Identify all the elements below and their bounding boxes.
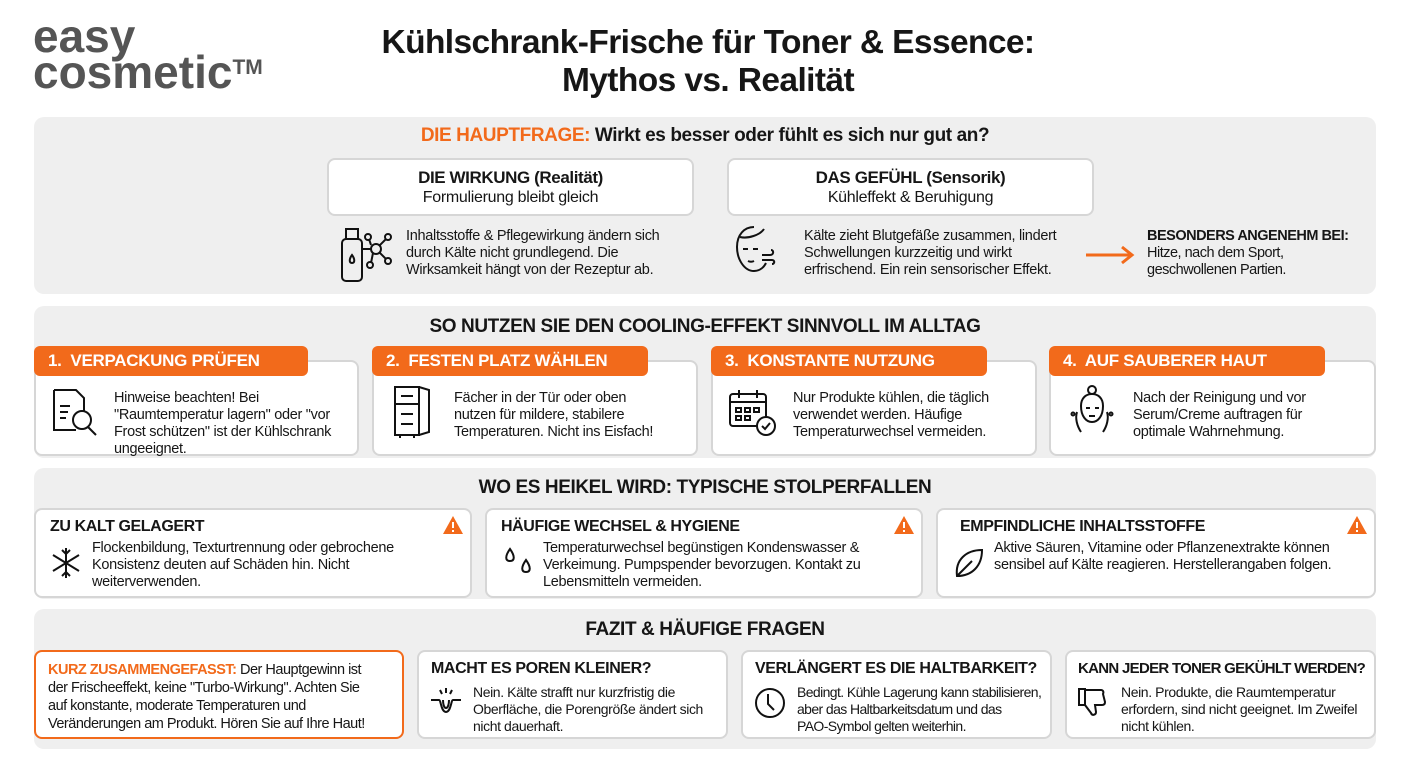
card: haltbarkeit: PAO-Symbol gelten weiterhin. (797, 718, 966, 734)
text: gefühl: Kälte zieht Blutgefäße zusammen, lindert (804, 228, 1056, 244)
tab 2: 2. FESTEN PLATZ WÄHLEN (386, 351, 607, 370)
card: zusammenfassung: auf konstante, moderate Temperaturen und (48, 698, 306, 714)
text: wirkung: Wirksamkeit hängt von der Rezeptur ab. (406, 262, 653, 278)
card: poren: nicht dauerhaft. (473, 718, 563, 734)
tab 3: 3. KONSTANTE NUTZUNG (725, 351, 935, 370)
heading: stolperfallen: WO ES HEIKEL WIRD: TYPISCHE STOLPERFALLEN (479, 477, 931, 498)
card: zu kalt: weiterverwenden. (92, 574, 201, 590)
card: zusammenfassung: der Frischeeffekt, keine "Turbo-Wirkung". Achten Sie (48, 680, 360, 696)
heading: hauptfrage: DIE HAUPTFRAGE: Wirkt es besser oder fühlt es sich nur gut an? (421, 125, 989, 146)
text (793, 390, 989, 440)
card: zu kalt: Flockenbildung, Texturtrennung oder gebrochene (92, 540, 394, 556)
icon: pore (431, 688, 461, 713)
card: poren: MACHT ES POREN KLEINER? (431, 660, 651, 677)
card: hygiene: HÄUFIGE WECHSEL & HYGIENE (501, 518, 740, 535)
text: besonders: geschwollenen Partien. (1147, 262, 1286, 278)
tab 1: 1. VERPACKUNG PRÜFEN (48, 351, 260, 370)
card: haltbarkeit: aber das Haltbarkeitsdatum und das (797, 701, 1002, 717)
card: poren (417, 650, 728, 739)
text: besonders (1147, 228, 1348, 278)
card: jeder toner: KANN JEDER TONER GEKÜHLT WERDEN? (1078, 660, 1365, 677)
card: zusammenfassung: KURZ ZUSAMMENGEFASST: Der Hauptgewinn ist (48, 662, 361, 678)
text: wirkung (406, 228, 659, 278)
card: zusammenfassung (34, 650, 404, 739)
card 4 (1049, 360, 1376, 456)
text (1133, 390, 1306, 440)
box: wirkung: DIE WIRKUNG (Realität) (418, 168, 603, 187)
text: gefühl: Schwellungen kurzzeitig und wirkt (804, 245, 1012, 261)
card: zu kalt (34, 508, 472, 598)
text: wirkung: Inhaltsstoffe & Pflegewirkung ändern sich (406, 228, 659, 244)
card: jeder toner (1065, 650, 1376, 739)
box: gefühl (727, 158, 1094, 216)
logo: easy (33, 10, 135, 62)
icon: face (736, 226, 776, 272)
text: Temperaturen. Nicht ins Eisfach! (454, 424, 653, 440)
text: nutzen für mildere, stabilere (454, 407, 624, 423)
icon: clock (755, 688, 785, 718)
card: hygiene: Verkeimung. Pumpspender bevorzugen. Kontakt zu (543, 557, 860, 573)
box: wirkung: Formulierung bleibt gleich (423, 189, 598, 206)
text: "Raumtemperatur lagern" oder "vor (114, 407, 330, 423)
box: gefühl: Kühleffekt & Beruhigung (828, 189, 993, 206)
icon: calendar (729, 390, 776, 436)
panel: cooling-effekt (34, 306, 1376, 458)
card: zu kalt: Konsistenz deuten auf Schäden hin. Nicht (92, 557, 349, 573)
card: hygiene: Lebensmitteln vermeiden. (543, 574, 702, 590)
text: Nach der Reinigung und vor (1133, 390, 1306, 406)
card 2 (372, 360, 698, 456)
text: gefühl (804, 228, 1057, 278)
tab 2 (372, 346, 648, 376)
text: Fächer in der Tür oder oben (454, 390, 626, 406)
card: zusammenfassung: Veränderungen am Produkt. Hören Sie auf Ihre Haut! (48, 716, 365, 732)
card: jeder toner: nicht kühlen. (1121, 718, 1194, 734)
box: gefühl: DAS GEFÜHL (Sensorik) (816, 168, 1005, 187)
card: hygiene: Temperaturwechsel begünstigen Kondenswasser & (543, 540, 859, 556)
logo: cosmeticTM (33, 46, 263, 98)
icon: bottle (341, 228, 392, 282)
card: inhaltsstoffe (936, 508, 1376, 598)
title: Kühlschrank-Frische für Toner & Essence: (381, 24, 1034, 61)
card 3 (711, 360, 1037, 456)
card: inhaltsstoffe: sensibel auf Kälte reagieren. Herstellerangaben folgen. (994, 557, 1331, 573)
icon: drops (505, 547, 531, 573)
text: Temperaturwechsel vermeiden. (793, 424, 986, 440)
card: jeder toner: erfordern, sind nicht geeignet. Im Zweifel (1121, 701, 1357, 717)
card: zu kalt: ZU KALT GELAGERT (50, 518, 204, 535)
icon: washing face (1070, 385, 1114, 432)
icon: document search (53, 389, 97, 436)
panel: stolperfallen (34, 468, 1376, 599)
card: poren: Oberfläche, die Porengröße ändert sich (473, 701, 703, 717)
card 1 (34, 360, 359, 456)
box: wirkung (327, 158, 694, 216)
card: hygiene (485, 508, 923, 598)
card: jeder toner: Nein. Produkte, die Raumtemperatur (1121, 684, 1335, 700)
tab 4: 4. AUF SAUBERER HAUT (1063, 351, 1267, 370)
text: optimale Wahrnehmung. (1133, 424, 1284, 440)
text: besonders: Hitze, nach dem Sport, (1147, 245, 1284, 261)
text: gefühl: erfrischend. Ein rein sensorischer Effekt. (804, 262, 1051, 278)
card: poren: Nein. Kälte strafft nur kurzfristig die (473, 684, 675, 700)
title (381, 24, 1034, 99)
heading: fazit: FAZIT & HÄUFIGE FRAGEN (585, 619, 825, 640)
icon: snowflake (52, 548, 80, 578)
tab 3 (711, 346, 987, 376)
heading: cooling: SO NUTZEN SIE DEN COOLING-EFFEKT SINNVOLL IM ALLTAG (429, 316, 980, 337)
text (114, 390, 332, 457)
icon: warning (443, 516, 463, 534)
tab 4 (1049, 346, 1325, 376)
card: inhaltsstoffe: Aktive Säuren, Vitamine oder Pflanzenextrakte können (994, 540, 1330, 556)
logo (33, 10, 263, 98)
text: besonders: BESONDERS ANGENEHM BEI: (1147, 228, 1348, 244)
text: Frost schützen" ist der Kühlschrank (114, 424, 331, 440)
icon: fridge (394, 386, 430, 438)
text: Serum/Creme auftragen für (1133, 407, 1302, 423)
title: Mythos vs. Realität (562, 62, 854, 99)
card: haltbarkeit: Bedingt. Kühle Lagerung kann stabilisieren, (797, 684, 1041, 700)
arrow (1086, 246, 1134, 264)
icon: warning (1347, 516, 1367, 534)
icon: thumbs down (1078, 688, 1106, 716)
text: verwendet werden. Häufige (793, 407, 962, 423)
icon: warning (894, 516, 914, 534)
card: haltbarkeit: VERLÄNGERT ES DIE HALTBARKEIT? (755, 660, 1037, 677)
text: Nur Produkte kühlen, die täglich (793, 390, 989, 406)
text: wirkung: durch Kälte nicht grundlegend. Die (406, 245, 618, 261)
text: Hinweise beachten! Bei (114, 390, 259, 406)
text (454, 390, 653, 440)
card: haltbarkeit (741, 650, 1052, 739)
panel: hauptfrage (34, 117, 1376, 294)
panel: fazit (34, 609, 1376, 749)
tab 1 (34, 346, 308, 376)
card: inhaltsstoffe: EMPFINDLICHE INHALTSSTOFFE (960, 518, 1205, 535)
text: ungeeignet. (114, 441, 186, 457)
icon: leaf (956, 549, 983, 577)
